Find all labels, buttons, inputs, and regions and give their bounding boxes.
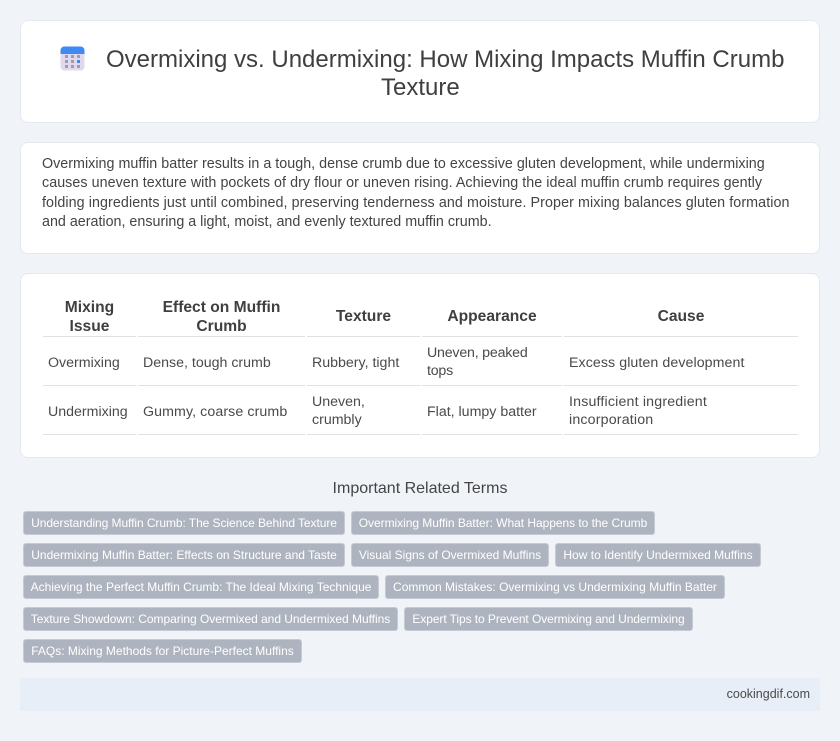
related terms tags: Overmixing Muffin Batter: What Happens to the Crumb — [359, 516, 647, 530]
table header row: Crumb — [196, 318, 247, 335]
header card — [20, 20, 820, 123]
comparison table panel — [20, 273, 820, 458]
intro text panel — [20, 142, 820, 254]
footer source text: cookingdif.com — [727, 687, 810, 701]
title — [106, 46, 784, 101]
table row: overmixing: Excess gluten development — [569, 355, 745, 371]
related terms tags: Visual Signs of Overmixed Muffins — [359, 548, 541, 562]
intro paragraph: folding ingredients just until combined, preserving tenderness and moisture. Proper mixing balances gluten formation — [42, 195, 790, 211]
table row: undermixing — [48, 394, 707, 428]
table header row — [65, 299, 704, 335]
table row: undermixing: Flat, lumpy batter — [427, 404, 537, 420]
table row: overmixing: Uneven, peaked — [427, 345, 528, 361]
related terms tags: FAQs: Mixing Methods for Picture-Perfect Muffins — [31, 644, 294, 658]
table row: overmixing: Dense, tough crumb — [143, 355, 271, 371]
intro paragraph: causes uneven texture with pockets of dry flour or uneven rising. Achieving the ideal muffin crumb requires gently — [42, 175, 762, 191]
related terms tags: Understanding Muffin Crumb: The Science Behind Texture — [31, 516, 337, 530]
intro paragraph: Overmixing muffin batter results in a tough, dense crumb due to excessive gluten development, while undermixing — [42, 156, 765, 172]
table row: undermixing: Undermixing — [48, 404, 128, 420]
related terms tags: Common Mistakes: Overmixing vs Undermixing Muffin Batter — [393, 580, 717, 594]
related terms tags: Texture Showdown: Comparing Overmixed and Undermixed Muffins — [31, 612, 390, 626]
table row: undermixing: crumbly — [312, 412, 362, 428]
related terms heading: Important Related Terms — [333, 480, 507, 497]
table row: undermixing: Uneven, — [312, 394, 365, 410]
footer bar — [20, 678, 820, 711]
table header row: Mixing — [65, 299, 114, 316]
table header row: Cause — [658, 308, 704, 325]
title: Texture — [381, 74, 460, 101]
title: Overmixing vs. Undermixing: How Mixing Impacts Muffin Crumb — [106, 46, 784, 73]
related terms tags: Achieving the Perfect Muffin Crumb: The Ideal Mixing Technique — [31, 580, 371, 594]
table header row: Appearance — [447, 308, 537, 325]
intro paragraph: and aeration, ensuring a light, moist, and evenly textured muffin crumb. — [42, 214, 492, 230]
table header row: Issue — [70, 318, 109, 335]
icon: calendar — [60, 46, 84, 70]
table header row: Effect on Muffin — [163, 299, 280, 316]
table row: undermixing: Gummy, coarse crumb — [143, 404, 287, 420]
related terms tags — [23, 511, 761, 663]
table row: undermixing: incorporation — [569, 412, 653, 428]
table row: overmixing — [48, 345, 745, 379]
table row: undermixing: Insufficient ingredient — [569, 394, 707, 410]
table row: overmixing: tops — [427, 363, 453, 379]
table row: overmixing: Overmixing — [48, 355, 120, 371]
table header row: Texture — [336, 308, 391, 325]
related terms tags: Undermixing Muffin Batter: Effects on Structure and Taste — [31, 548, 337, 562]
table row: overmixing: Rubbery, tight — [312, 355, 399, 371]
intro paragraph — [42, 156, 790, 230]
related terms tags: Expert Tips to Prevent Overmixing and Undermixing — [412, 612, 685, 626]
related terms tags: How to Identify Undermixed Muffins — [563, 548, 753, 562]
